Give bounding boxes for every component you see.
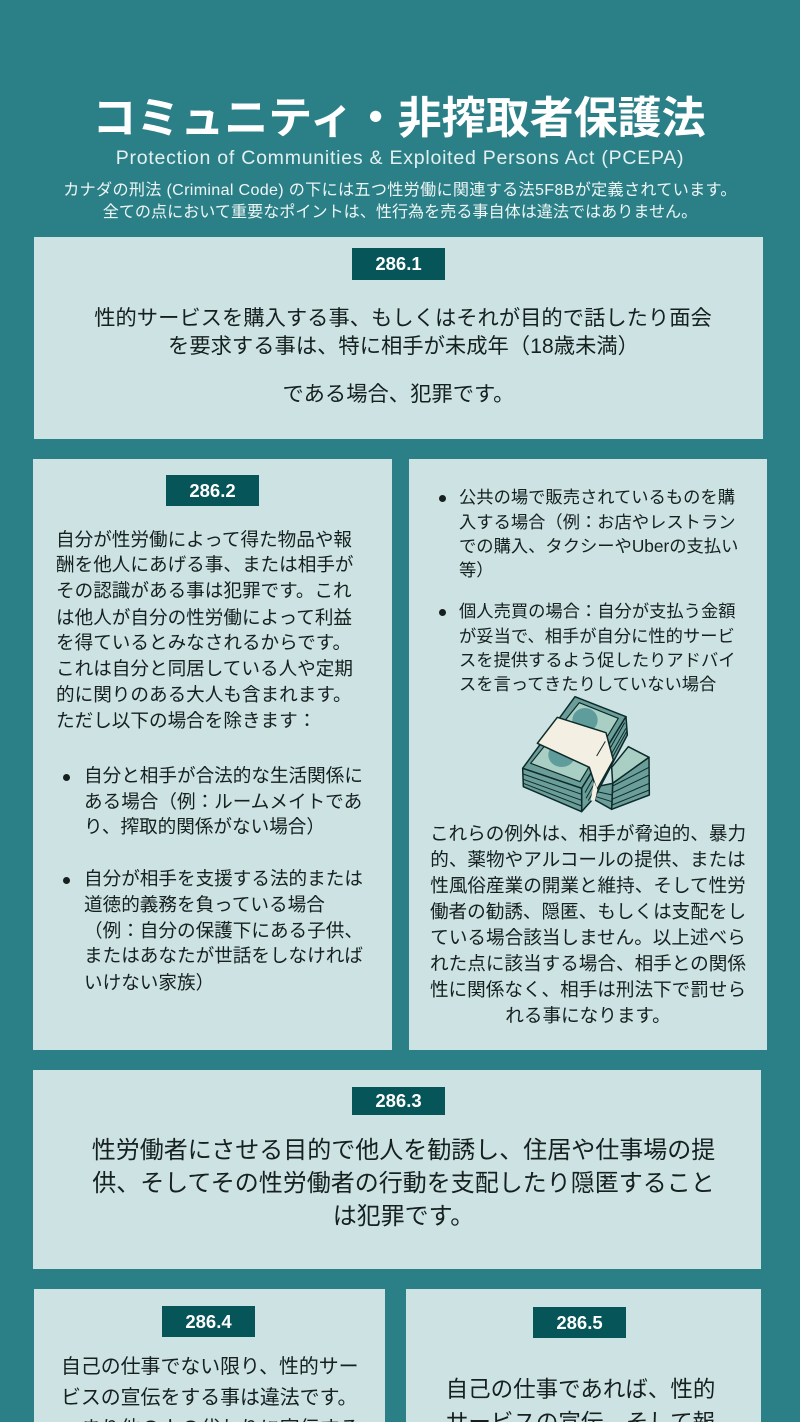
bullet: legal duty bbox=[63, 868, 363, 993]
text: 286.1: 性的サービスを購入する事、もしくはそれが目的で話したり面会 bbox=[94, 306, 712, 330]
bullet: private sales: が妥当で、相手が自分に性的サービ bbox=[459, 626, 735, 646]
bullet: public purchases: での購入、タクシーやUberの支払い bbox=[459, 536, 738, 556]
text: 286.2 intro: 的に関りのある大人も含まれます。 bbox=[56, 684, 352, 705]
text: exceptions: れる事になります。 bbox=[505, 1005, 671, 1026]
badge: 286.2: 286.2 bbox=[189, 480, 236, 501]
badge: 286.3: 286.3 bbox=[375, 1090, 422, 1111]
icon: money stacks bbox=[522, 696, 650, 812]
bullet: legal duty: 自分が相手を支援する法的または bbox=[84, 868, 363, 889]
bullet: living arrangement: り、搾取的関係がない場合） bbox=[84, 816, 325, 837]
badge: 286.1: 286.1 bbox=[375, 253, 422, 274]
badge: 286.5: 286.5 bbox=[556, 1312, 603, 1333]
front bundle bbox=[523, 697, 627, 812]
panel: 286.2 continued bbox=[409, 459, 767, 1050]
text: exceptions: 的、薬物やアルコールの提供、または bbox=[430, 849, 746, 870]
text: 286.2 intro: を得ているとみなされるからです。 bbox=[56, 632, 351, 653]
text: 286.4 bbox=[61, 1356, 359, 1422]
bullet: public purchases: 入する場合（例：お店やレストラン bbox=[459, 512, 736, 532]
paper band bbox=[537, 717, 613, 801]
text: 286.3 bbox=[92, 1137, 715, 1230]
text: exceptions: これらの例外は、相手が脅迫的、暴力 bbox=[430, 823, 746, 844]
rear bundle bbox=[595, 747, 649, 809]
text: 286.2 intro: ただし以下の場合を除きます： bbox=[56, 710, 316, 731]
text: 286.3: 性労働者にさせる目的で他人を勧誘し、住居や仕事場の提 bbox=[92, 1137, 715, 1164]
badge: 286.5 bbox=[533, 1307, 626, 1338]
badge: 286.4: 286.4 bbox=[185, 1311, 232, 1332]
bullet: public purchases: 公共の場で販売されているものを購 bbox=[459, 487, 735, 507]
text: 286.2 intro: 自分が性労働によって得た物品や報 bbox=[56, 529, 352, 550]
text: 286.1: である場合、犯罪です。 bbox=[283, 382, 514, 406]
badge: 286.3 bbox=[352, 1087, 445, 1115]
bullet: legal duty: （例：自分の保護下にある子供、 bbox=[84, 920, 363, 941]
bullet: living arrangement: 自分と相手が合法的な生活関係に bbox=[84, 765, 363, 786]
bullet: public purchases: 等） bbox=[459, 560, 494, 580]
bullet: private sales: スを提供するよう促したりアドバイ bbox=[459, 650, 736, 670]
text: 286.5 bbox=[446, 1377, 715, 1422]
text: 286.4: ビスの宣伝をする事は違法です。 bbox=[61, 1387, 357, 1409]
text: exceptions bbox=[430, 823, 746, 1026]
panel: 286.1 bbox=[34, 237, 763, 439]
panel: 286.5 bbox=[406, 1289, 761, 1422]
text: 286.2 intro bbox=[56, 529, 354, 731]
header bbox=[63, 94, 737, 221]
text: exceptions: 性に関係なく、相手は刑法下で罰せら bbox=[430, 979, 746, 1000]
bullet: living arrangement: ある場合（例：ルームメイトであ bbox=[84, 791, 362, 812]
bullet: private sales: スを言ってきたりしていない場合 bbox=[459, 674, 716, 694]
bullet: private sales bbox=[439, 601, 736, 694]
text: 286.3: 供、そしてその性労働者の行動を支配したり隠匿すること bbox=[92, 1170, 715, 1197]
intro text: 全ての点において重要なポイントは、性行為を売る事自体は違法ではありません。 bbox=[103, 203, 697, 221]
bullet: legal duty: 道徳的義務を負っている場合 bbox=[84, 894, 325, 915]
text: exceptions: ている場合該当しません。以上述べら bbox=[430, 927, 746, 948]
badge: 286.4 bbox=[162, 1306, 255, 1337]
intro text bbox=[63, 181, 737, 221]
text: 286.5: 自己の仕事であれば、性的 bbox=[446, 1377, 715, 1402]
text: exceptions: 働者の勧誘、隠匿、もしくは支配をし bbox=[430, 901, 746, 922]
text: 286.2 intro: 酬を他人にあげる事、または相手が bbox=[56, 554, 354, 575]
badge: 286.1 bbox=[352, 248, 445, 280]
text: 286.1 bbox=[94, 306, 712, 406]
text: 286.1: を要求する事は、特に相手が未成年（18歳未満） bbox=[168, 334, 639, 358]
bullet: legal duty: またはあなたが世話をしなければ bbox=[84, 945, 363, 966]
text: 286.3: は犯罪です。 bbox=[333, 1203, 474, 1230]
badge: 286.2 bbox=[166, 475, 259, 506]
title: コミュニティ・非搾取者保護法 bbox=[92, 94, 706, 143]
text: 286.2 intro: これは自分と同居している人や定期 bbox=[56, 658, 353, 679]
text: 286.4: 自己の仕事でない限り、性的サー bbox=[61, 1356, 359, 1378]
bullet: living arrangement bbox=[63, 765, 363, 837]
panel: 286.4 bbox=[34, 1289, 385, 1422]
bullet: private sales: 個人売買の場合：自分が支払う金額 bbox=[459, 601, 736, 621]
subtitle: Protection of Communities & Exploited Persons Act (PCEPA) bbox=[116, 147, 684, 169]
text: exceptions: れた点に該当する場合、相手との関係 bbox=[430, 953, 746, 974]
bullet: legal duty: いけない家族） bbox=[84, 972, 214, 993]
panel: 286.3 bbox=[33, 1070, 761, 1269]
text: 286.2 intro: その認識がある事は犯罪です。これ bbox=[56, 580, 352, 601]
panel: 286.2 bbox=[33, 459, 392, 1050]
text: exceptions: 性風俗産業の開業と維持、そして性労 bbox=[430, 875, 746, 896]
bullet: public purchases bbox=[439, 487, 738, 580]
intro text: カナダの刑法 (Criminal Code) の下には五つ性労働に関連する法5F8Bが定義されています。 bbox=[63, 181, 737, 199]
text: 286.2 intro: は他人が自分の性労働によって利益 bbox=[56, 607, 352, 628]
